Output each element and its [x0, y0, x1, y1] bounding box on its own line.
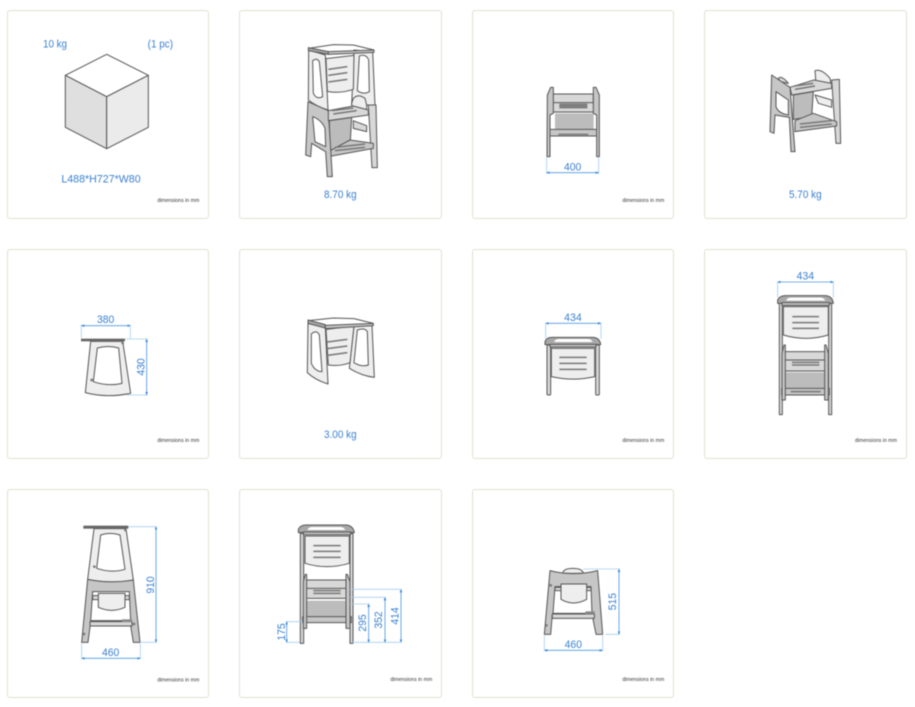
card background: [240, 250, 442, 458]
card background: [704, 10, 906, 218]
dimension: 434 width: [546, 312, 601, 339]
units note: dimensions in mm: [390, 677, 432, 683]
panel: upper part isometric: [240, 250, 442, 458]
card background: [240, 490, 442, 698]
panel: assembled tower isometric: [240, 10, 442, 218]
units note: dimensions in mm: [157, 438, 199, 444]
illustration: assembled tower: [306, 45, 377, 177]
dimension: 352 step height: [350, 597, 386, 642]
dimension: 380 width: 380: [97, 314, 114, 326]
illustration: step stool side: [544, 568, 603, 634]
card background: [704, 250, 906, 458]
card background: [8, 490, 208, 698]
dimension: 175 step height: [276, 622, 303, 642]
illustration: upper part front: [545, 337, 601, 395]
card background: [472, 490, 674, 698]
dimension: 295 step height: 295: [357, 614, 369, 632]
dimension: 430 height: [126, 339, 147, 395]
quantity label: (1 pc): [148, 39, 173, 51]
panel: step stool isometric: [704, 10, 906, 218]
dimension: 434 width: 434: [796, 270, 814, 282]
weight label: 10 kg: [43, 39, 67, 51]
units note: dimensions in mm: [157, 198, 199, 204]
dimension: 430 height: 430: [135, 358, 147, 376]
dimension: 380 width: [81, 314, 130, 339]
dimension: 910 height: [129, 527, 157, 642]
weight label: 5.70 kg: [789, 189, 822, 201]
dimension: 295 step height: [350, 604, 369, 642]
weight label: 3.00 kg: [324, 429, 357, 441]
units note: dimensions in mm: [855, 438, 897, 444]
card background: [472, 250, 674, 458]
units note: dimensions in mm: [622, 438, 664, 444]
dimension: 400 width: [547, 157, 599, 174]
dimension: 910 height: 910: [145, 576, 157, 594]
panel: assembled tower step heights: [240, 490, 442, 698]
panel: assembled tower side view: [8, 490, 208, 698]
dimension: 460 width: [544, 636, 603, 651]
illustration: tower front: [778, 296, 833, 415]
dimension: 434 width: [778, 270, 833, 297]
units note: dimensions in mm: [622, 677, 664, 683]
dimension: 175 step height: 175: [276, 623, 288, 641]
icon: cardboard box: [65, 54, 148, 149]
illustration: upper part side: [81, 339, 131, 396]
dimension: 460 width: 460: [102, 647, 119, 659]
panel: step stool front width: [472, 10, 674, 218]
card background: [240, 10, 442, 218]
units note: dimensions in mm: [622, 198, 664, 204]
illustration: tower front with steps: [298, 525, 354, 643]
dimension: 515 height: 515: [607, 593, 619, 610]
illustration: upper part isometric: [307, 318, 374, 384]
weight label: 8.70 kg: [324, 189, 357, 201]
illustration: tower side: [82, 526, 140, 642]
dimension: 352 step height: 352: [373, 611, 385, 629]
card background: [8, 10, 208, 218]
panel: upper part front view: [472, 250, 674, 458]
box dimensions label: L488*H727*W80: [61, 174, 141, 186]
dimension: 460 width: 460: [565, 639, 582, 651]
dimension: 460 width: [82, 643, 140, 659]
dimension: 414 step height: [350, 589, 402, 642]
illustration: step stool isometric: [770, 70, 841, 152]
dimension: 400 width: 400: [564, 161, 581, 173]
panel: step stool side view: [472, 490, 674, 698]
panel: assembled tower front width: [704, 250, 906, 458]
dimension: 515 height: [583, 569, 620, 634]
card background: [8, 250, 208, 458]
units note: dimensions in mm: [157, 677, 199, 683]
dimension: 434 width: 434: [564, 312, 582, 324]
dimension: 414 step height: 414: [389, 607, 401, 625]
panel: packaging box: [8, 10, 208, 218]
panel: upper part side view: [8, 250, 208, 458]
illustration: step stool front: [547, 87, 599, 157]
card background: [472, 10, 674, 218]
